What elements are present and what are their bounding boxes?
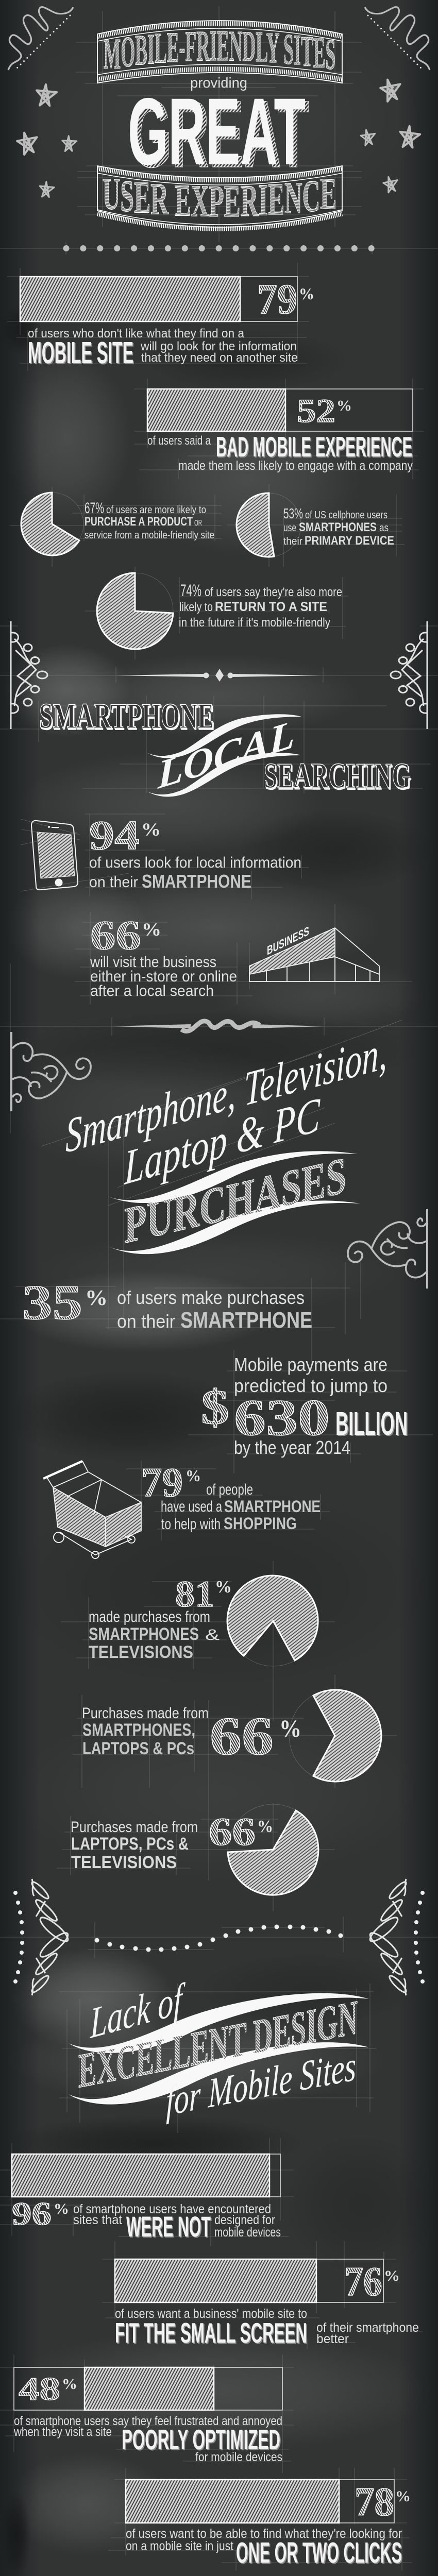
text block: return to a site: 74% [180,581,201,600]
stat: 48 percent [19,2370,77,2407]
text block: smartphones and televisions: SMARTPHONES [89,1624,199,1644]
text block: help with shopping: SMARTPHONE [224,1497,321,1516]
stat: 78 percent: % [395,2488,411,2505]
stat: 66 percent: % [142,919,161,940]
stat: 35 percent [22,1275,108,1330]
text block: poorly optimized: when they visit a site [13,2425,112,2439]
stat: 78 percent: 78 [355,2479,394,2524]
divider: twisted rule [112,1021,324,1031]
icon: smartphone [31,821,78,890]
text block: primary device: as [379,522,389,534]
text block: fit the small screen: better [316,2332,349,2346]
text block: poorly optimized [13,2414,282,2464]
stat: 96 percent: 96 [12,2195,52,2232]
stat: 81 percent: 81 [175,1573,214,1615]
stat: 52 percent: % [336,397,352,414]
pie chart: 81 percent [227,1575,318,1666]
text block: one or two clicks: on a mobile site in just [126,2539,233,2553]
text block: mobile site: MOBILE SITE [29,337,134,371]
dotted divider [63,245,375,251]
decoration: corner flourishes [8,7,430,70]
panel: 48 percent poorly optimized [13,2367,282,2464]
stat: 66 percent small: % [257,1817,273,1836]
text block: laptops pcs televisions [71,1819,198,1872]
panel: 74 percent pie [97,573,342,649]
panel: 76 percent small screen [115,2259,419,2350]
text block: smartphones and televisions: & [205,1626,220,1643]
text block: mobile site: will go look for the information [140,340,297,353]
bottom banner frame [97,166,342,229]
text block: visit the business: either in-store or online [90,968,237,985]
stat: 94 percent: % [141,819,161,840]
pie chart: 66 percent second [228,1804,318,1895]
stat: 81 percent [175,1573,232,1615]
text block: return to a site: RETURN TO A SITE [215,600,327,614]
icon: shopping cart [43,1461,141,1558]
panel: 79 percent mobile site [20,275,314,371]
text block: laptops pcs televisions: Purchases made from [71,1819,198,1836]
text block: primary device: their [283,536,302,547]
heading line: providing: providing [190,75,247,91]
text block: visit the business [90,954,237,999]
panel: 66 percent smartphones laptops pcs [82,1690,381,1782]
text block: local information: of users look for local information [89,854,301,871]
text block: purchases on smartphone: SMARTPHONE [180,1308,312,1333]
panel: 52 percent bad experience [147,389,413,473]
heading line: laptop and pc: Laptop & PC [124,1087,321,1195]
text block: one or two clicks: of users want to be able to find what they're looking for [126,2527,402,2541]
text block: primary device: of US cellphone users [305,510,388,521]
text block: one or two clicks [126,2527,403,2570]
heading line: mobile-friendly sites: MOBILE-FRIENDLY SITES [104,22,335,79]
text block: purchase a product: of users are more likely to [106,504,206,516]
text block: visit the business: will visit the business [90,954,216,971]
text block: smartphones laptops and pcs: LAPTOPS & PCs [82,1739,194,1758]
icon: business building [249,924,379,981]
text block: local information: SMARTPHONE [142,871,251,892]
text block: purchase a product: PURCHASE A PRODUCT [85,515,193,529]
stat: 79 percent of people [141,1460,201,1505]
text block: smartphones and televisions: made purchases from [89,1608,210,1625]
text block: fit the small screen: of their smartphone [316,2320,419,2335]
heading line: great [128,79,309,188]
text block: laptops pcs televisions: LAPTOPS, PCs & [71,1834,189,1854]
ribbon: purchases banner [108,1151,360,1254]
panel: 96 percent not designed [12,2154,281,2244]
panel: 53 percent pie [237,493,394,557]
text block: help with shopping [161,1481,321,1533]
text block: purchases on smartphone: on their [117,1311,175,1332]
panel: 66 percent visit the business [90,913,379,999]
label: billion [335,1405,409,1443]
text block: primary device [283,505,394,548]
stat: 66 percent small [209,1810,273,1854]
text block: were not designed: WERE NOT [127,2211,212,2244]
text block: purchases on smartphone [117,1287,312,1333]
pie chart: 67 percent [21,493,83,555]
stat: 79 percent of people: % [186,1466,201,1485]
text block: were not designed: mobile devices [214,2225,281,2240]
text block: help with shopping: to help with [161,1516,221,1533]
icon: business building: BUSINESS [267,924,309,958]
stat: 66 percent large [210,1706,301,1766]
text block: smartphones and televisions: TELEVISIONS [89,1642,193,1662]
pie chart: 66 percent [289,1690,381,1782]
text block: bad mobile experience [147,431,413,473]
text block: smartphones laptops and pcs [82,1705,209,1758]
text block: smartphones laptops and pcs: Purchases made from [82,1705,209,1722]
text block: return to a site: of users say they're also more [205,585,342,599]
stat: 630 dollars: $ [201,1380,229,1434]
text block: poorly optimized: for mobile devices [195,2450,282,2464]
divider: diamond rule [116,669,321,682]
pie chart: 74 percent [97,573,173,649]
text block: smartphones laptops and pcs: SMARTPHONES, [82,1720,195,1740]
bar chart: 76 percent [115,2259,383,2302]
heading line: lack of: Lack of [90,1974,186,2048]
stat: 94 percent [89,813,161,858]
stat: 35 percent: 35 [22,1275,82,1330]
ribbon: local banner [147,714,301,797]
stat: 94 percent: 94 [89,813,140,858]
text block: mobile payments intro [234,1354,388,1396]
stat: 76 percent: 76 [344,2259,382,2304]
ornaments: knotted side brackets [10,621,428,729]
text block: purchase a product [85,500,214,541]
text block: return to a site: likely to [179,600,213,614]
panel: 78 percent one or two clicks [126,2479,411,2570]
text block: were not designed: WERE NOT [126,2210,211,2243]
heading line: smartphone [39,697,215,738]
heading line: user experience: USER EXPERIENCE [103,169,336,227]
ribbon: excellent design banner [69,1993,369,2105]
text block: bad mobile experience: of users said a [147,434,211,448]
title: main heading [97,21,342,229]
bar chart: 48 percent [14,2367,282,2410]
panel: 79 percent shopping [43,1460,321,1558]
stat: 48 percent: % [62,2376,77,2393]
text block: were not designed: designed for [214,2213,275,2227]
text block: smartphones and televisions [89,1608,220,1662]
stat: 81 percent: % [215,1578,232,1597]
stat: 66 percent: 66 [90,913,141,958]
stat: 96 percent [12,2195,69,2232]
text block: return to a site [179,581,342,630]
stat: 48 percent: 48 [19,2370,60,2407]
text block: by the year: by the year 2014 [234,1437,350,1458]
stat: 630 dollars: 630 [234,1389,330,1446]
text block: local information: on their [89,874,138,891]
stat: 66 percent large: 66 [210,1706,274,1766]
stat: 66 percent [90,913,161,958]
stat: 79 percent: 79 [257,275,297,323]
text block: were not designed [73,2202,281,2244]
text block: return to a site: in the future if it's mobile-friendly [179,616,330,630]
text block: primary device: SMARTPHONES [299,520,377,534]
heading line: smartphone: SMARTPHONE [40,698,215,738]
stat: 52 percent [297,393,352,430]
text block: mobile payments intro: predicted to jump to [234,1375,388,1396]
stat: 66 percent large: % [279,1715,301,1742]
ornaments: scrollwork brackets [10,1032,428,1289]
divider: dotted wave [95,1925,343,1952]
heading: smartphone local searching [39,697,412,798]
stat: 52 percent: 52 [297,393,335,430]
pie chart: 53 percent [237,493,301,557]
stat: 96 percent: % [54,2200,69,2217]
stat: 76 percent: % [384,2267,400,2284]
panel: 66 percent laptops pcs televisions [71,1804,318,1895]
text block: primary device: 53% [283,505,303,521]
text block: mobile site: of users who don't like what they find on a [28,327,245,341]
text block: poorly optimized: POORLY OPTIMIZED [123,2425,281,2456]
stat: 66 percent small: 66 [209,1810,256,1854]
text block: help with shopping: SHOPPING [224,1514,297,1533]
stat: 79 percent of people: 79 [141,1460,183,1505]
decoration: hand-drawn stars [16,78,421,198]
heading line: smartphone: SMARTPHONE [39,697,214,736]
heading line: purchases: PURCHASES [124,1146,346,1255]
text block: mobile payments intro: Mobile payments are [234,1354,388,1375]
panel: 35 percent purchases [22,1275,312,1333]
panel: 81 percent pie [89,1573,318,1666]
bar chart: 79 percent [20,277,297,321]
text block: purchase a product: service from a mobile-friendly site [85,530,214,541]
panel: 94 percent smartphone [31,813,301,892]
text block: purchase a product: 67% [85,500,104,517]
text block: help with shopping: have used a [161,1498,222,1515]
heading: lack of excellent design [69,1974,369,2125]
heading line: for mobile sites: for Mobile Sites [166,2042,356,2125]
text block: mobile site [28,327,298,371]
text block: mobile site: MOBILE SITE [28,336,133,370]
ornaments: laced side brackets [13,1879,425,1995]
stat: 79 percent: % [299,284,314,303]
top banner frame [97,21,342,83]
bar chart: 78 percent [126,2480,394,2523]
text block: local information [89,854,301,892]
text block: mobile site: that they need on another site [141,351,298,365]
text block: were not designed: sites that [73,2213,122,2227]
text block: help with shopping: of people [206,1481,253,1498]
heading: purchases [65,1025,387,1255]
text block: primary device: use [283,522,296,534]
bar chart: 52 percent [147,389,413,431]
text block: fit the small screen: of users want a business' mobile site to [115,2307,307,2321]
text block: visit the business: after a local search [90,982,214,999]
bar chart: 96 percent [12,2154,280,2197]
text block: purchase a product: OR [194,519,202,528]
text block: poorly optimized: POORLY OPTIMIZED [122,2424,280,2455]
text block: poorly optimized: of smartphone users say they feel frustrated and annoyed [14,2414,282,2428]
text block: were not designed: of smartphone users have encountered [73,2202,271,2216]
panel: 67 percent pie [21,493,214,555]
text block: purchases on smartphone: of users make purchases [117,1287,305,1308]
text block: primary device: PRIMARY DEVICE [305,534,394,548]
panel: 630 billion mobile payments [201,1354,409,1458]
text block: laptops pcs televisions: TELEVISIONS [71,1853,177,1872]
heading line: local: LOCAL [157,711,295,798]
stat: 630 dollars [201,1380,330,1446]
stat: 35 percent: % [85,1286,108,1310]
